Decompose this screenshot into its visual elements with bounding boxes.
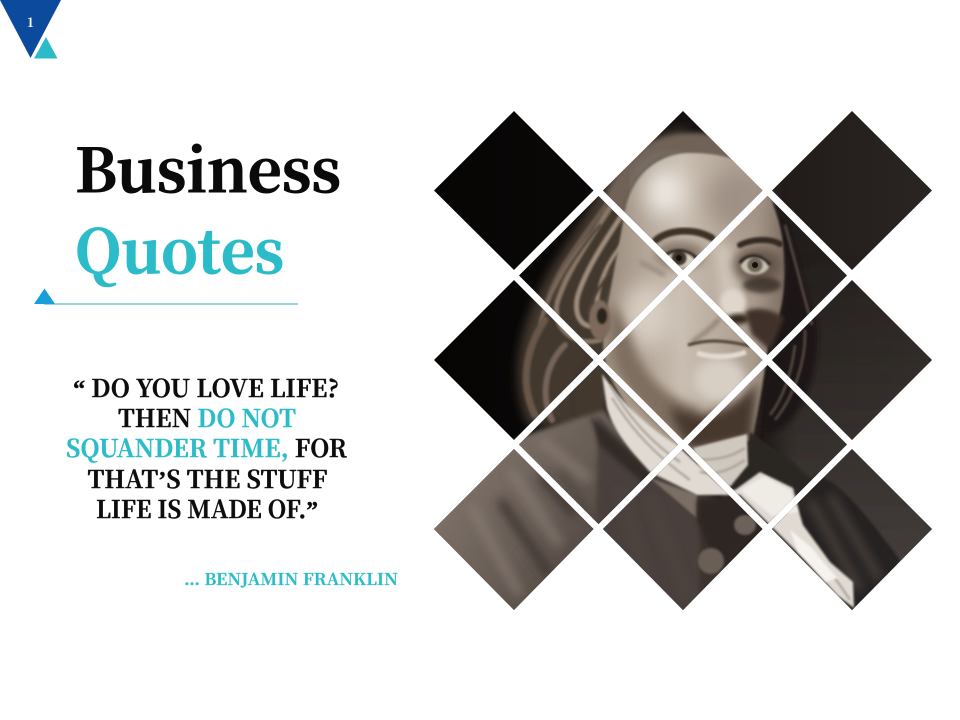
page number: 1 [27,12,34,31]
facial shading [589,168,784,452]
eyebrows [656,231,780,245]
banner: navy corner triangle with page number [0,0,61,58]
buttons [698,515,756,574]
left hair [518,128,690,430]
portrait: diamond mosaic of Benjamin Franklin [420,105,940,620]
head and neck [603,153,784,450]
divider with triangle marker [34,288,298,304]
eyes [664,250,770,274]
title accent word: Quotes [75,205,284,291]
quote text: “ DO YOU LOVE LIFE? [73,370,339,405]
cravat [602,374,854,608]
quote text: THAT’S THE STUFF [88,461,328,496]
title: Business [75,124,341,210]
quote text: SQUANDER TIME, FOR [66,430,348,465]
quote text: THEN DO NOT [118,400,296,435]
quote text: LIFE IS MADE OF.” [96,491,318,526]
mouth [688,341,750,357]
coat [420,410,900,620]
right hair [766,206,820,432]
icon: small teal triangle [34,37,58,58]
quote attribution: … BENJAMIN FRANKLIN [184,567,398,590]
quote text [66,370,348,526]
title [75,124,341,291]
top hair [605,133,775,215]
